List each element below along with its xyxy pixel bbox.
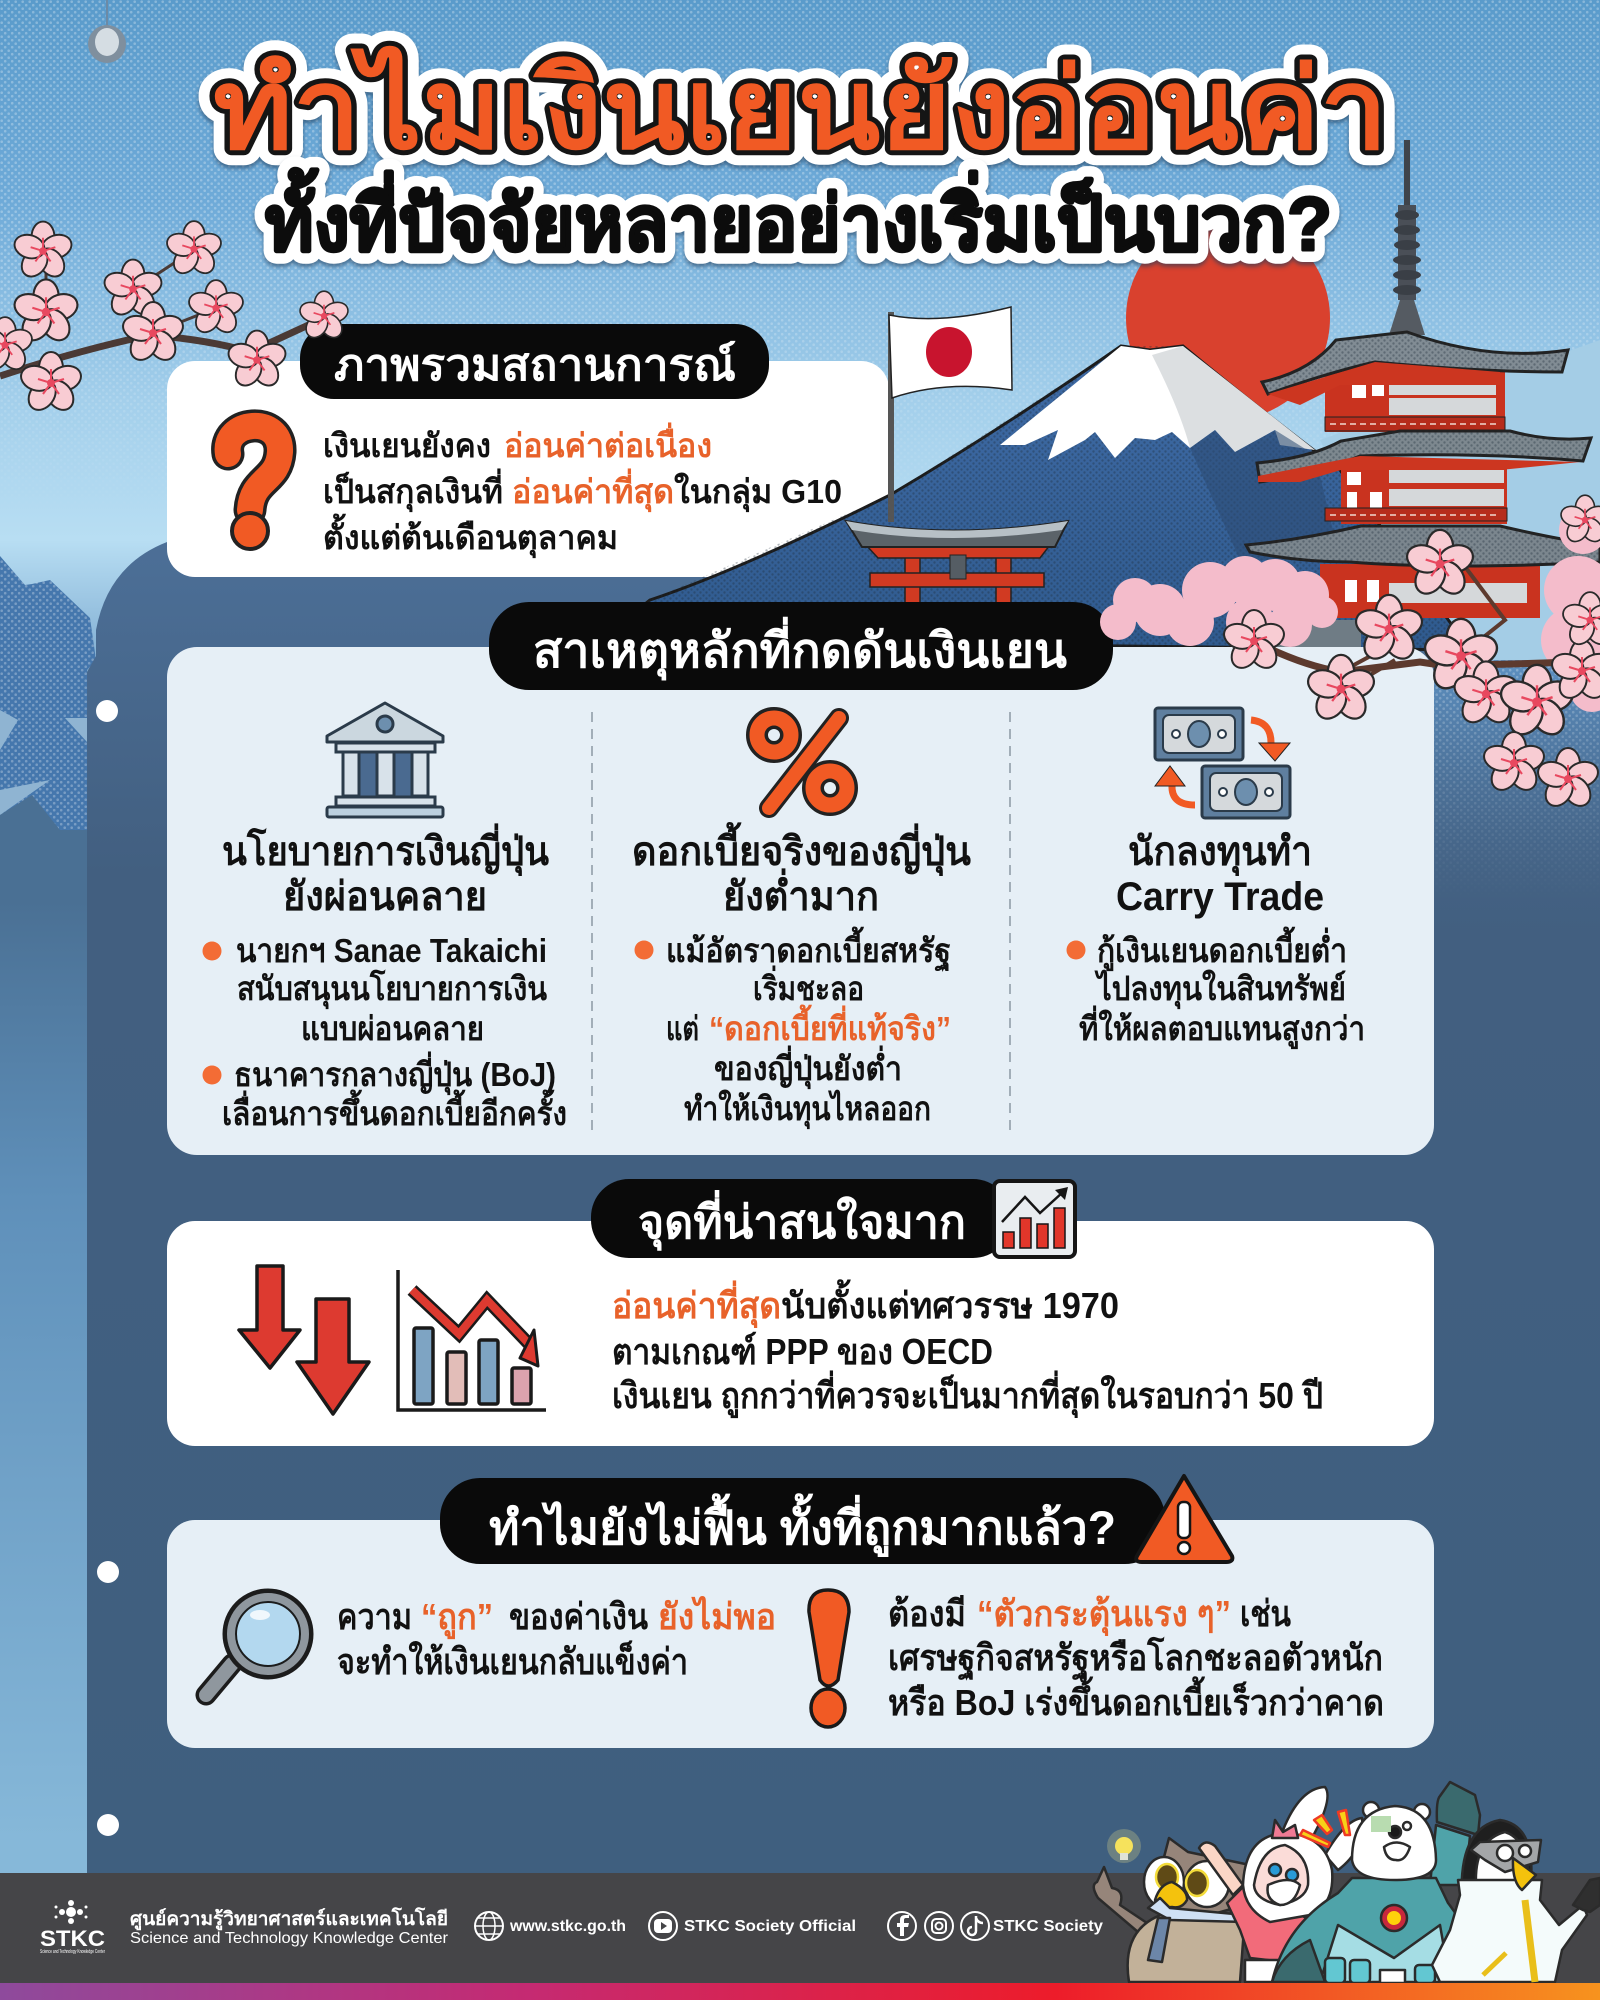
- why right text: เช่น: [1240, 1593, 1291, 1634]
- footer social: [888, 1912, 1103, 1940]
- overview text: [323, 422, 842, 559]
- footer social: STKC Society: [993, 1918, 1103, 1935]
- light bulb: [1107, 1829, 1141, 1863]
- footer youtube: STKC Society Official: [684, 1918, 856, 1935]
- icon: warning triangle: [1136, 1476, 1232, 1562]
- panel: very interesting point: [167, 1221, 1434, 1446]
- column 2 bullets: “ดอกเบี้ยที่แท้จริง”: [709, 1004, 951, 1047]
- left distant mountains: [0, 556, 96, 900]
- mascot: penguin: [1432, 1820, 1600, 1982]
- title line 2: ทั้งที่ปัจจัยหลายอย่างเริ่มเป็นบวก?: [265, 168, 1332, 267]
- why left text: จะทำให้เงินเยนกลับแข็งค่า: [337, 1639, 688, 1682]
- footer logo: STKC: [40, 1926, 105, 1951]
- footer website: [475, 1912, 626, 1940]
- hanging ornament: [88, 0, 126, 63]
- navy content background: [87, 542, 1600, 1873]
- why pill: [440, 1478, 1165, 1564]
- pagoda top storey: [1325, 366, 1505, 432]
- icon: rising chart: [994, 1181, 1075, 1257]
- title line 1: ทำไมเงินเยนยังอ่อนค่า: [213, 46, 1388, 172]
- pagoda middle storey: [1325, 466, 1507, 524]
- panel: why not recovered: [167, 1520, 1434, 1748]
- column 1 bullets: เลื่อนการขึ้นดอกเบี้ยอีกครั้ง: [222, 1089, 567, 1132]
- interesting pill: จุดที่น่าสนใจมาก: [638, 1190, 966, 1251]
- overview text: ในกลุ่ม G10: [674, 472, 842, 513]
- column 3 bullets: [1066, 926, 1365, 1050]
- overview text: อ่อนค่าที่สุด: [512, 468, 674, 513]
- icon: money exchange: [1155, 708, 1290, 818]
- title: [213, 46, 1388, 267]
- icon: orange exclamation mark: [809, 1590, 849, 1727]
- column 2 heading: [632, 822, 971, 919]
- mount fuji: [600, 346, 1470, 650]
- column 3 bullets: ที่ให้ผลตอบแทนสูงกว่า: [1079, 1005, 1365, 1050]
- interesting text: [612, 1279, 1323, 1419]
- icon: falling bar chart: [398, 1270, 546, 1410]
- panel: main causes: [167, 647, 1434, 1155]
- overview text: เป็นสกุลเงินที่: [323, 468, 503, 513]
- title line 1: ทำไมเงินเยนยังอ่อนค่า: [213, 46, 1388, 172]
- pink blossom mass: [1100, 506, 1600, 712]
- pagoda: [1246, 140, 1600, 647]
- why right text: [888, 1593, 1384, 1723]
- column 3 bullets: ไปลงทุนในสินทรัพย์: [1094, 969, 1346, 1010]
- column 1 bullets: [202, 932, 567, 1132]
- column 3 heading: Carry Trade: [1116, 875, 1324, 919]
- why right text: “ตัวกระตุ้นแรง ๆ”: [977, 1593, 1231, 1637]
- column 1 bullets: ธนาคารกลางญี่ปุ่น (BoJ): [234, 1051, 556, 1096]
- footer organisation name: Science and Technology Knowledge Center: [130, 1930, 449, 1947]
- column 2 bullets: แต่: [666, 1010, 699, 1047]
- column 2 bullets: แม้อัตราดอกเบี้ยสหรัฐ: [666, 926, 951, 972]
- mascot: bunny: [1199, 1787, 1362, 1982]
- interesting text: ตามเกณฑ์ PPP ของ OECD: [612, 1331, 993, 1372]
- overview text: เงินเยนยังคง: [323, 427, 491, 464]
- causes pill: [489, 602, 1113, 690]
- why left text: ของค่าเงิน: [509, 1596, 648, 1637]
- interesting pill: [591, 1179, 1011, 1258]
- column 3 heading: [1116, 830, 1324, 919]
- column 2 heading: ยังต่ำมาก: [723, 868, 879, 919]
- interesting text: เงินเยน ถูกกว่าที่ควรจะเป็นมากที่สุดในรอบกว่า 50 ปี: [612, 1370, 1323, 1419]
- footer gradient strip: [0, 1983, 1600, 2000]
- mascot: polar bear: [1272, 1782, 1480, 1983]
- panel: overview: [167, 361, 889, 577]
- torii gate: [846, 521, 1068, 610]
- why left text: ความ: [337, 1596, 412, 1637]
- halftone sky texture: [0, 0, 1600, 434]
- cherry blossoms left: [0, 221, 351, 415]
- why pill: ทำไมยังไม่ฟื้น ทั้งที่ถูกมากแล้ว?: [489, 1493, 1116, 1558]
- pagoda lower storey: [1320, 564, 1540, 618]
- mascots: [1094, 1782, 1600, 1983]
- column 1: monetary policy: [202, 703, 567, 1132]
- flag of Japan: [888, 307, 1012, 522]
- column 2: real interest rate: [632, 718, 971, 1130]
- column 1 bullets: แบบผ่อนคลาย: [301, 1010, 484, 1047]
- overview text: อ่อนค่าต่อเนื่อง: [504, 422, 712, 464]
- column 3 heading: นักลงทุนทำ: [1128, 830, 1312, 877]
- column 1 bullets: นายกฯ Sanae Takaichi: [236, 932, 547, 969]
- why right text: หรือ BoJ เร่งขึ้นดอกเบี้ยเร็วกว่าคาด: [888, 1676, 1384, 1723]
- footer website: www.stkc.go.th: [509, 1918, 626, 1935]
- interesting text: นับตั้งแต่ทศวรรษ 1970: [781, 1279, 1119, 1326]
- why left text: [337, 1595, 776, 1682]
- right blue glow: [1434, 660, 1600, 870]
- why left text: “ถูก”: [421, 1596, 493, 1640]
- causes pill: สาเหตุหลักที่กดดันเงินเยน: [533, 616, 1067, 681]
- overview pill: [300, 324, 769, 399]
- footer bar: [0, 1873, 1600, 1983]
- why right text: เศรษฐกิจสหรัฐหรือโลกชะลอตัวหนัก: [888, 1636, 1383, 1681]
- column 2 bullets: ทำให้เงินทุนไหลออก: [684, 1089, 931, 1130]
- icon: double down arrows: [239, 1266, 369, 1414]
- footer organisation name: ศูนย์ความรู้วิทยาศาสตร์และเทคโนโลยี: [130, 1907, 448, 1931]
- icon: magnifier: [206, 1591, 311, 1695]
- footer youtube: [649, 1912, 856, 1940]
- column 2 bullets: ของญี่ปุ่นยังต่ำ: [714, 1045, 902, 1090]
- mascot: owl: [1094, 1838, 1250, 1982]
- icon: bank: [327, 703, 443, 817]
- cherry blossoms right: [1221, 495, 1600, 811]
- why left text: ยังไม่พอ: [658, 1595, 776, 1637]
- interesting text: อ่อนค่าที่สุด: [612, 1280, 781, 1329]
- column 2 bullets: [634, 926, 951, 1130]
- column 2 heading: ดอกเบี้ยจริงของญี่ปุ่น: [632, 822, 971, 877]
- overview pill: ภาพรวมสถานการณ์: [334, 340, 736, 390]
- column 3: carry trade: [1066, 708, 1365, 1050]
- column 1 heading: ยังผ่อนคลาย: [283, 875, 487, 919]
- right sky patch: [1320, 340, 1600, 660]
- title line 2: ทั้งที่ปัจจัยหลายอย่างเริ่มเป็นบวก?: [265, 168, 1332, 267]
- why right text: ต้องมี: [888, 1593, 966, 1634]
- footer logo: [40, 1900, 105, 1955]
- binder holes: [96, 700, 119, 1836]
- column 1 bullets: สนับสนุนนโยบายการเงิน: [237, 969, 547, 1010]
- column 1 heading: นโยบายการเงินญี่ปุ่น: [222, 823, 549, 877]
- column 1 heading: [222, 823, 549, 919]
- column 3 bullets: กู้เงินเยนดอกเบี้ยต่ำ: [1097, 926, 1347, 972]
- overview text: ตั้งแต่ต้นเดือนตุลาคม: [323, 513, 618, 559]
- overview question mark icon: [228, 426, 280, 549]
- icon: percent: [757, 718, 847, 808]
- column 2 bullets: เริ่มชะลอ: [753, 965, 864, 1007]
- red sun: [1126, 216, 1330, 420]
- footer logo: Science and Technology Knowledge Center: [40, 1949, 105, 1955]
- footer organisation name: [130, 1907, 449, 1947]
